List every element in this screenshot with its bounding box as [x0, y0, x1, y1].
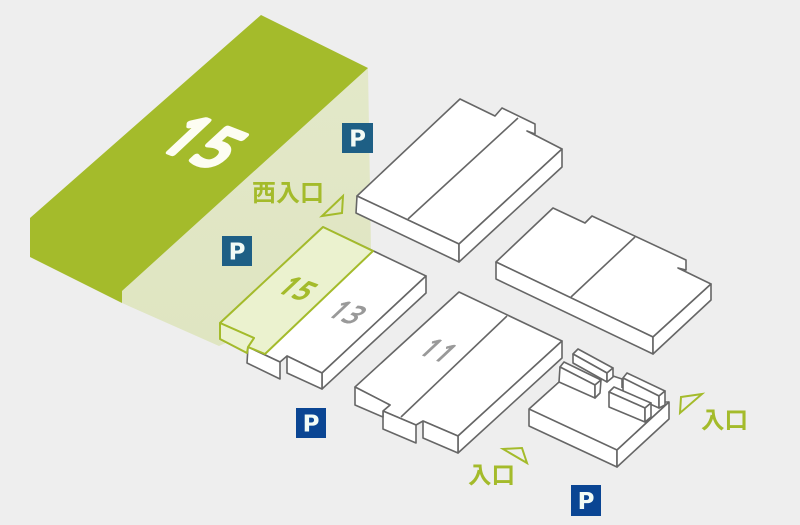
building: east hall [496, 208, 711, 354]
highlighted hall 15 block [30, 15, 368, 303]
rooftop unit back-left [573, 349, 613, 382]
arrow: west entrance [322, 196, 343, 216]
rooftop unit back-right [623, 373, 665, 408]
rooftop unit front-left [559, 362, 601, 398]
projection beam from hall 15 [122, 68, 371, 346]
label: 15 small: 15 [271, 274, 321, 305]
west entrance label: 西入口 [252, 180, 324, 207]
arrow: south entrance [503, 448, 527, 463]
parking icon north [342, 123, 373, 153]
label: 11: 11 [412, 336, 462, 367]
building: halls 13 and 15 [220, 227, 426, 389]
parking icon south-east: P [578, 489, 594, 515]
parking icon south-east [571, 485, 601, 516]
parking icon north: P [349, 126, 366, 152]
south entrance label: 入口 [468, 462, 515, 488]
parking icon west [222, 236, 252, 266]
building: small south-east hall with rooftop units [529, 349, 669, 467]
rooftop unit front-right [609, 387, 651, 422]
arrow: east entrance [680, 394, 702, 413]
label: 13: 13 [321, 298, 371, 329]
hall 15 highlighted front [220, 323, 254, 353]
label: 15 large: 15 [146, 110, 255, 178]
building: hall 11 [355, 292, 562, 453]
east entrance label: 入口 [701, 407, 748, 433]
parking icon west: P [229, 240, 245, 266]
hall 15 highlighted zone [220, 227, 373, 354]
parking icon south-west [296, 408, 326, 438]
parking icon south-west: P [303, 412, 319, 438]
building: north-east hall [356, 99, 562, 262]
